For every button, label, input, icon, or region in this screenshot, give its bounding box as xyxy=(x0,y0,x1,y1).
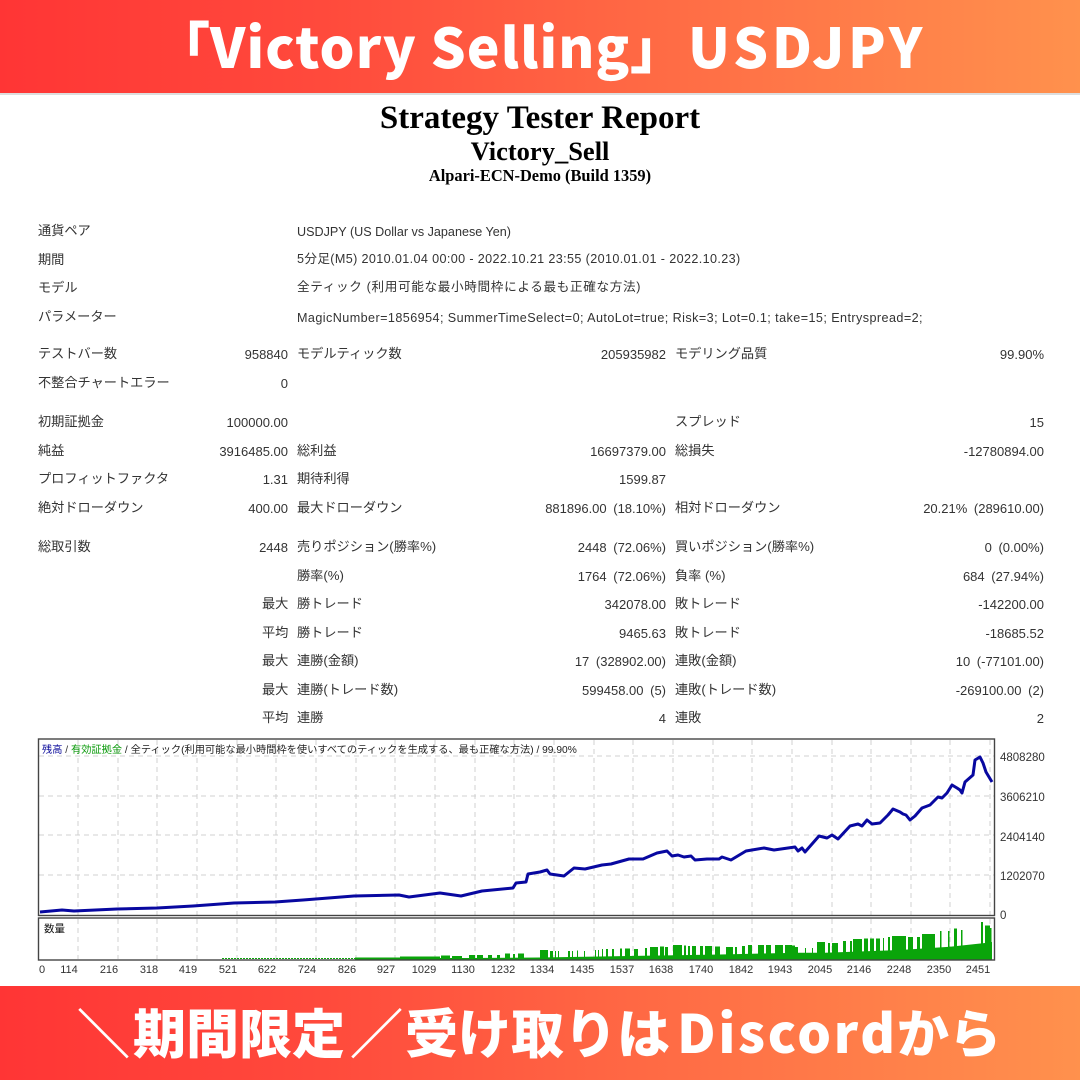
panel: profit statistics: 期待利得 xyxy=(297,471,350,486)
panel: test settings: パラメーター xyxy=(38,309,117,324)
panel: trade statistics: 連敗(金額) xyxy=(675,653,737,668)
balance curve xyxy=(40,757,992,912)
panel: trade statistics: -269100.00 (2) xyxy=(956,683,1044,698)
panel: trade statistics: 連勝 xyxy=(297,710,323,725)
panel: trade statistics: 最大 xyxy=(262,653,288,668)
panel: profit statistics: 総損失 xyxy=(675,443,715,458)
panel: profit statistics: 相対ドローダウン xyxy=(675,500,780,515)
volume label: 数量 xyxy=(44,922,65,935)
x axis labels: 1943 xyxy=(768,964,792,976)
panel: test settings xyxy=(38,223,923,325)
footer banner: 期間限定 xyxy=(133,993,345,1069)
x axis labels: 216 xyxy=(100,964,118,976)
panel: trade statistics: -18685.52 xyxy=(985,626,1044,641)
footer banner: から xyxy=(897,993,1001,1068)
panel: trade statistics: 10 (-77101.00) xyxy=(956,654,1044,669)
panel: trade statistics: 敗トレード xyxy=(675,596,741,611)
panel: test settings: 通貨ペア xyxy=(38,223,91,238)
panel: profit statistics: 15 xyxy=(1030,415,1044,430)
panel: trade statistics: 最大 xyxy=(262,682,288,697)
x axis labels: 1537 xyxy=(610,964,634,976)
x axis labels: 318 xyxy=(140,964,158,976)
panel: profit statistics: 100000.00 xyxy=(227,415,288,430)
x axis labels: 927 xyxy=(377,964,395,976)
x axis labels: 2350 xyxy=(927,964,951,976)
footer banner: ＼ xyxy=(77,993,130,1069)
panel: trade statistics: 2448 xyxy=(259,540,288,555)
x axis labels: 1638 xyxy=(649,964,673,976)
panel: trade statistics: 売りポジション(勝率%) xyxy=(297,539,436,554)
chart legend: 残高 / 有効証拠金 / 全ティック(利用可能な最小時間枠を使いすべてのティックを生成する、最も正確な方法) / 99.90% xyxy=(42,743,577,756)
panel: profit statistics: 1599.87 xyxy=(619,472,666,487)
panel: test quality: モデルティック数 xyxy=(297,346,402,361)
header banner xyxy=(0,0,1080,93)
panel: trade statistics: 勝率(%) xyxy=(297,568,344,583)
footer banner: 受け取りは xyxy=(405,993,670,1069)
panel: test settings: 5分足(M5) 2010.01.04 00:00 - 2022.10.21 23:55 (2010.01.01 - 2022.10.23) xyxy=(297,252,741,266)
y axis labels: 3606210 xyxy=(1000,792,1045,804)
panel: trade statistics: 買いポジション(勝率%) xyxy=(675,539,814,554)
panel: test settings: 全ティック (利用可能な最小時間枠による最も正確な方法) xyxy=(297,280,641,294)
panel: profit statistics: スプレッド xyxy=(675,414,741,429)
x axis labels: 1435 xyxy=(570,964,594,976)
panel: profit statistics: 3916485.00 xyxy=(219,444,288,459)
volume bars xyxy=(222,922,992,960)
header banner: 「 xyxy=(155,4,210,84)
panel: trade statistics: -142200.00 xyxy=(978,597,1044,612)
y axis labels xyxy=(1000,752,1045,922)
x axis labels: 0 xyxy=(39,964,45,976)
y axis labels: 4808280 xyxy=(1000,752,1045,764)
y axis labels: 2404140 xyxy=(1000,832,1045,844)
panel: trade statistics: 最大 xyxy=(262,596,288,611)
panel: profit statistics: 絶対ドローダウン xyxy=(38,500,144,515)
panel: profit statistics: 881896.00 (18.10%) xyxy=(545,501,666,516)
x axis labels: 1740 xyxy=(689,964,713,976)
panel: profit statistics: 16697379.00 xyxy=(590,444,666,459)
panel: trade statistics: 0 (0.00%) xyxy=(985,540,1044,555)
panel: test settings: MagicNumber=1856954; SummerTimeSelect=0; AutoLot=true; Risk=3; Lot=0.1; take=15; Entryspread=2; xyxy=(297,311,923,325)
x axis labels: 2146 xyxy=(847,964,871,976)
x axis labels: 826 xyxy=(338,964,356,976)
x axis labels: 1232 xyxy=(491,964,515,976)
panel: profit statistics: -12780894.00 xyxy=(964,444,1044,459)
x axis labels: 2045 xyxy=(808,964,832,976)
panel: test quality: 不整合チャートエラー xyxy=(38,375,170,390)
panel: test settings: モデル xyxy=(38,280,78,295)
y axis labels: 0 xyxy=(1000,910,1006,922)
panel: test settings: USDJPY (US Dollar vs Japanese Yen) xyxy=(297,225,511,239)
panel: trade statistics: 連勝(金額) xyxy=(297,653,359,668)
panel: profit statistics: プロフィットファクタ xyxy=(38,471,169,486)
panel: trade statistics: 1764 (72.06%) xyxy=(578,569,666,584)
x axis labels: 2248 xyxy=(887,964,911,976)
x axis labels: 114 xyxy=(60,964,78,976)
report title: Strategy Tester Report xyxy=(380,100,700,136)
broker and build: Alpari-ECN-Demo (Build 1359) xyxy=(429,166,651,185)
footer banner: Discord xyxy=(677,993,898,1069)
panel: profit statistics: 初期証拠金 xyxy=(38,414,104,429)
panel: test quality: テストバー数 xyxy=(38,346,117,361)
x axis labels: 1334 xyxy=(530,964,554,976)
footer banner xyxy=(0,986,1080,1080)
x axis labels: 724 xyxy=(298,964,316,976)
panel: trade statistics: 平均 xyxy=(262,710,288,725)
panel: trade statistics: 684 (27.94%) xyxy=(963,569,1044,584)
panel: trade statistics xyxy=(38,539,1044,726)
x axis labels: 1842 xyxy=(729,964,753,976)
panel: trade statistics: 342078.00 xyxy=(605,597,666,612)
panel: test quality: 205935982 xyxy=(601,347,666,362)
panel: trade statistics: 負率 (%) xyxy=(675,568,726,583)
panel: profit statistics: 純益 xyxy=(38,443,64,458)
header banner: Victory Selling xyxy=(210,4,630,84)
panel: trade statistics: 敗トレード xyxy=(675,625,741,640)
panel: trade statistics: 599458.00 (5) xyxy=(582,683,666,698)
panel: test quality xyxy=(38,346,1044,391)
x axis labels: 1130 xyxy=(451,964,475,976)
panel: profit statistics: 最大ドローダウン xyxy=(297,500,402,515)
panel: trade statistics: 勝トレード xyxy=(297,596,363,611)
header banner: USDJPY xyxy=(688,4,926,84)
panel: trade statistics: 連敗 xyxy=(675,710,701,725)
panel: profit statistics xyxy=(38,414,1044,516)
x axis labels: 1029 xyxy=(412,964,436,976)
x axis labels: 2451 xyxy=(966,964,990,976)
x axis labels xyxy=(39,964,990,976)
panel: test quality: 0 xyxy=(281,376,288,391)
panel: profit statistics: 1.31 xyxy=(263,472,288,487)
panel: test settings: 期間 xyxy=(38,252,64,267)
panel: trade statistics: 9465.63 xyxy=(619,626,666,641)
panel: trade statistics: 4 xyxy=(659,711,666,726)
x axis labels: 521 xyxy=(219,964,237,976)
panel: profit statistics: 400.00 xyxy=(248,501,288,516)
panel: trade statistics: 2448 (72.06%) xyxy=(578,540,666,555)
x axis labels: 622 xyxy=(258,964,276,976)
header divider xyxy=(0,93,1080,95)
header banner: 」 xyxy=(630,4,685,84)
panel: test quality: 99.90% xyxy=(1000,347,1044,362)
panel: trade statistics: 連敗(トレード数) xyxy=(675,682,776,697)
panel: trade statistics: 総取引数 xyxy=(38,539,91,554)
panel: trade statistics: 平均 xyxy=(262,625,288,640)
panel: trade statistics: 2 xyxy=(1037,711,1044,726)
panel: trade statistics: 勝トレード xyxy=(297,625,363,640)
balance frame xyxy=(38,739,994,916)
chart: balance and volume xyxy=(38,738,1045,976)
expert advisor name: Victory_Sell xyxy=(471,136,609,166)
x axis labels: 419 xyxy=(179,964,197,976)
panel: profit statistics: 総利益 xyxy=(297,443,337,458)
y axis labels: 1202070 xyxy=(1000,871,1045,883)
panel: test quality: モデリング品質 xyxy=(675,346,767,361)
volume frame xyxy=(38,918,994,960)
footer banner: ／ xyxy=(350,993,403,1069)
panel: profit statistics: 20.21% (289610.00) xyxy=(923,501,1044,516)
panel: test quality: 958840 xyxy=(245,347,288,362)
panel: trade statistics: 17 (328902.00) xyxy=(575,654,666,669)
panel: trade statistics: 連勝(トレード数) xyxy=(297,682,398,697)
